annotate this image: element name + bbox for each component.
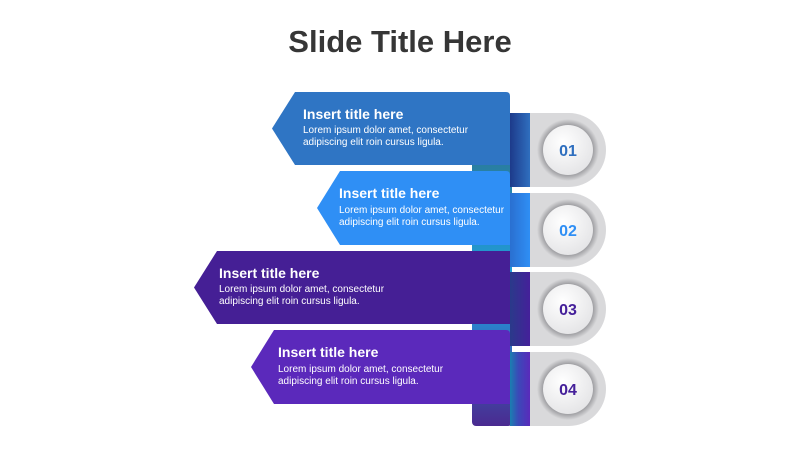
card 4	[251, 330, 510, 404]
card 2: Lorem ipsum dolor amet, consectetur	[339, 205, 505, 216]
tab 1: 01	[559, 143, 577, 160]
tab 1	[510, 113, 606, 187]
back strip	[472, 150, 512, 426]
card 3: adipiscing elit roin cursus ligula.	[219, 296, 360, 307]
tab 2: 02	[559, 223, 577, 240]
tab 3: 03	[559, 302, 577, 319]
card 1: Lorem ipsum dolor amet, consectetur	[303, 125, 469, 136]
card 1: adipiscing elit roin cursus ligula.	[303, 137, 444, 148]
card 2	[317, 171, 510, 245]
card 1	[272, 92, 510, 165]
card 3: Insert title here	[219, 265, 320, 281]
card 4: Lorem ipsum dolor amet, consectetur	[278, 364, 444, 375]
card 2: Insert title here	[339, 185, 440, 201]
tab 2	[510, 193, 606, 267]
card 3: Lorem ipsum dolor amet, consectetur	[219, 284, 385, 295]
card 4: adipiscing elit roin cursus ligula.	[278, 376, 419, 387]
tab 3	[510, 272, 606, 346]
card 4: Insert title here	[278, 344, 379, 360]
title: Slide Title Here	[288, 24, 512, 59]
card 3	[194, 251, 510, 324]
tab 4: 04	[559, 382, 577, 399]
card 1: Insert title here	[303, 106, 404, 122]
tab 4	[510, 352, 606, 426]
card 2: adipiscing elit roin cursus ligula.	[339, 217, 480, 228]
